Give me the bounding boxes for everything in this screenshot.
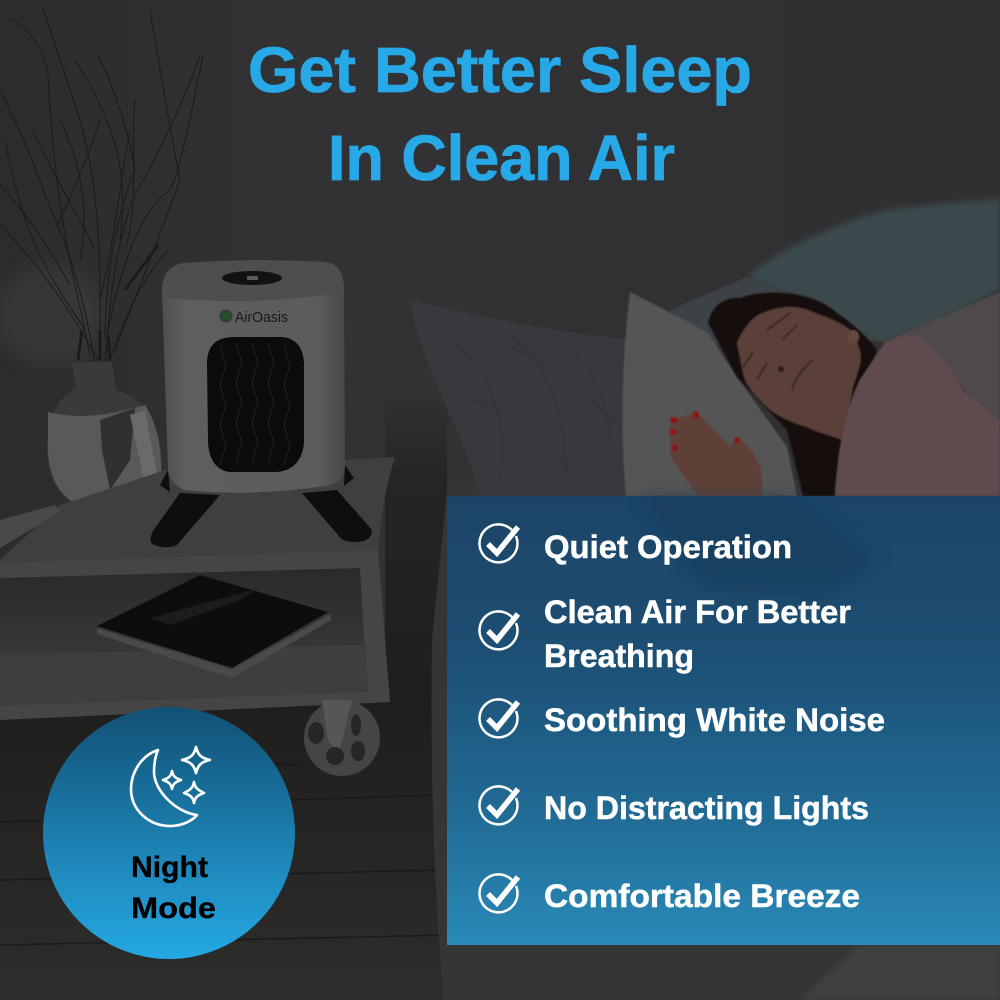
sleeping woman [669, 293, 1000, 496]
feature: Quiet Operation: Quiet Operation [544, 529, 792, 565]
grey pillow behind head [670, 277, 890, 345]
night mode badge: Mode [131, 892, 216, 925]
icon: crescent moon and stars [131, 747, 210, 826]
glass vase [47, 362, 162, 515]
title [248, 34, 752, 194]
purifier feet [151, 465, 372, 547]
ear [847, 330, 859, 344]
fluffy teal cushion [747, 200, 1000, 342]
soft white blossoms behind branches [0, 265, 105, 365]
white pillow [623, 292, 797, 496]
dark gap between nightstand and bed [385, 400, 447, 720]
feature: Comfortable Breeze: Comfortable Breeze [544, 878, 860, 914]
nose shadow [778, 366, 784, 372]
night mode badge: Night [131, 851, 208, 884]
feature panel [447, 496, 1000, 945]
pink pillow at right [883, 292, 1000, 430]
night mode badge [43, 707, 295, 959]
title: Get Better Sleep [248, 34, 752, 106]
feature: Clean Air For Better Breathing: Breathing [544, 638, 694, 674]
face [737, 307, 861, 440]
feature: Clean Air For Better Breathing [479, 594, 851, 674]
hair [708, 293, 877, 496]
air purifier [151, 260, 372, 547]
pink shirt [835, 336, 1000, 496]
feature: Clean Air For Better Breathing: Clean Air For Better [544, 594, 851, 630]
feature: No Distracting Lights: No Distracting Lights [544, 790, 869, 826]
hand [670, 412, 763, 496]
facial features [743, 313, 813, 390]
nightstand wheel [304, 700, 380, 776]
feature: Quiet Operation [479, 524, 792, 565]
bed sheets [432, 480, 1000, 1000]
feature: Soothing White Noise: Soothing White Noise [544, 702, 885, 738]
dry branches in vase [0, 5, 203, 365]
title: In Clean Air [328, 122, 675, 194]
wall pillow: quilted grey [410, 300, 640, 500]
air purifier: AirOasis [235, 309, 288, 326]
lower sheet fold [800, 945, 1000, 1000]
red nails [669, 411, 740, 452]
background: floor boards [0, 700, 450, 1000]
nightstand [0, 457, 395, 720]
book on shelf [97, 575, 331, 678]
